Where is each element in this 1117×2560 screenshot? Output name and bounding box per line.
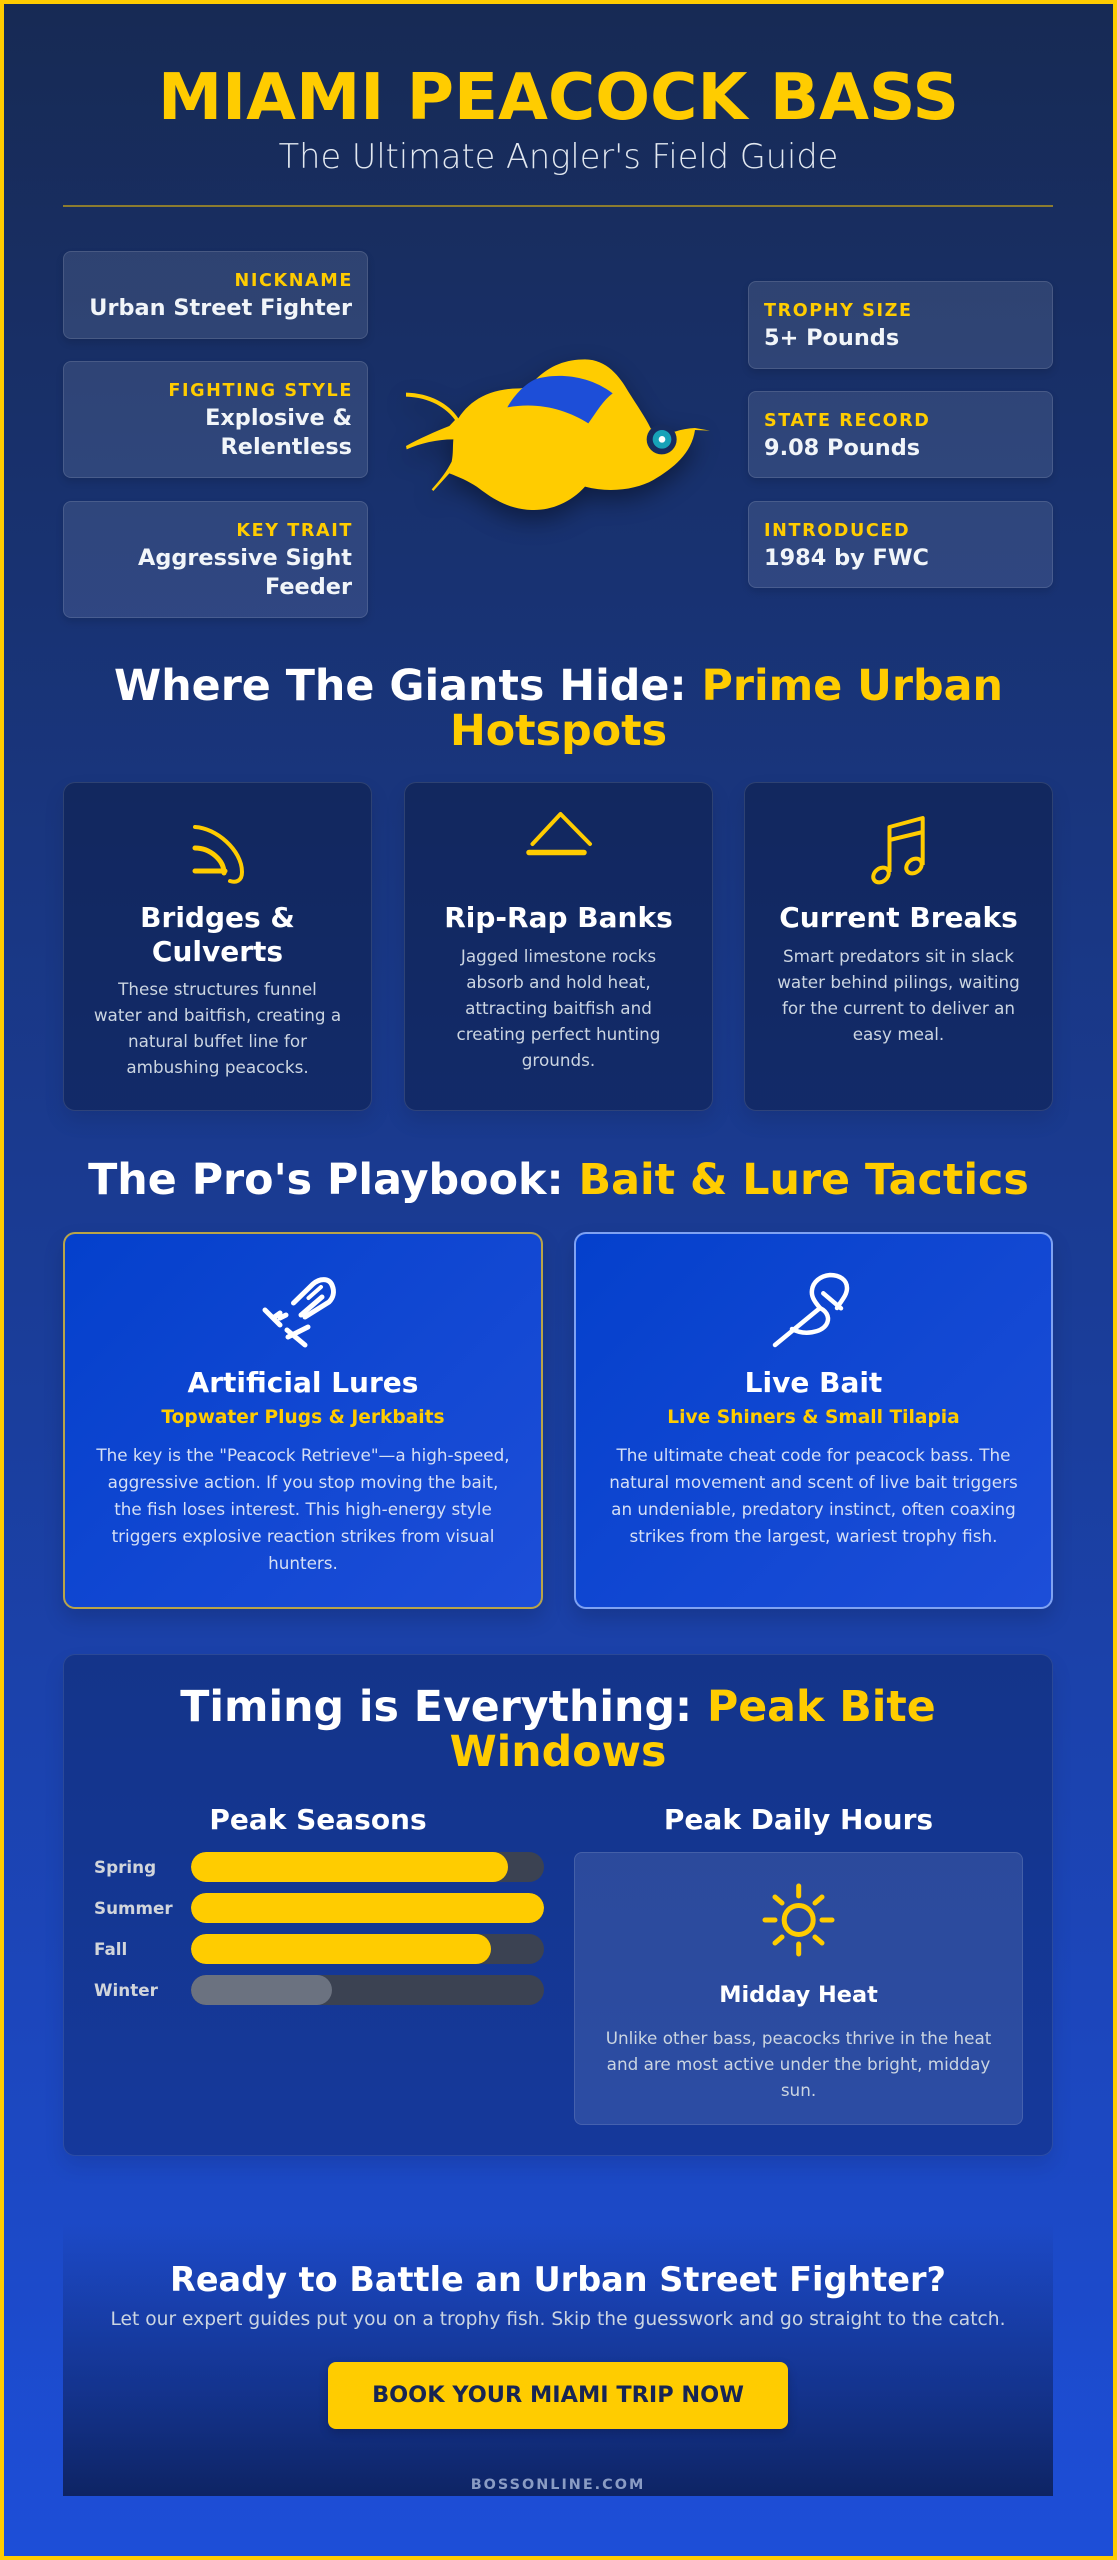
card text: Unlike other bass, peacocks thrive in the heat [606, 2028, 991, 2048]
card title: Midday Heat [719, 1982, 878, 2008]
stat card: fighting style: Explosive & [205, 404, 352, 430]
card text [606, 2028, 991, 2100]
card text: attracting baitfish and [465, 998, 652, 1018]
stat card: introduced: 1984 by FWC [764, 544, 929, 570]
panel: current breaks [744, 782, 1053, 1111]
bar: summer [191, 1893, 544, 1923]
stat card: key trait: KEY TRAIT [236, 521, 353, 541]
card text: for the current to deliver an [782, 998, 1015, 1018]
card text [94, 978, 341, 1076]
card subtitle: Live Shiners & Small Tilapia [667, 1406, 960, 1428]
cta text: Let our expert guides put you on a trophy fish. Skip the guesswork and go straight to the catch. [110, 2309, 1006, 2330]
heading: peak daily hours: Peak Daily Hours [664, 1802, 933, 1836]
heading: timing: Windows [450, 1727, 666, 1777]
heading: playbook: The Pro's Playbook: Bait & Lure Tactics [88, 1154, 1029, 1204]
card text: The ultimate cheat code for peacock bass. The [617, 1444, 1010, 1464]
card text: creating perfect hunting [457, 1024, 660, 1044]
stat card: fighting style: Relentless [221, 434, 352, 460]
card title: Current Breaks [779, 901, 1018, 934]
stat card: nickname: Urban Street Fighter [89, 294, 352, 320]
card text: sun. [781, 2080, 816, 2100]
bar: spring [191, 1852, 544, 1882]
stat card: introduced [748, 501, 1053, 588]
card text: Smart predators sit in slack [783, 946, 1014, 966]
heading: hotspots [114, 661, 1003, 756]
panel: artificial lures [63, 1232, 543, 1609]
stat card: key trait: Aggressive Sight [138, 544, 352, 570]
card title [140, 901, 295, 968]
icon: bridge [192, 825, 244, 884]
icon: feather [772, 1272, 850, 1348]
heading: timing [180, 1682, 936, 1777]
stat card: nickname [63, 251, 368, 339]
panel: rip-rap banks [404, 782, 713, 1111]
title: MIAMI PEACOCK BASS [158, 60, 959, 135]
stat card: trophy size [748, 281, 1053, 369]
stat card: fighting style: FIGHTING STYLE [168, 381, 353, 401]
bar: fall [191, 1934, 544, 1964]
panel: timing [63, 1654, 1053, 2156]
icon: peacock bass fish [406, 359, 710, 530]
panel: live bait [574, 1232, 1053, 1609]
heading: hotspots: Hotspots [450, 706, 667, 756]
heading: hotspots: Where The Giants Hide: Prime Urban [114, 661, 1003, 711]
stat card: key trait: Feeder [265, 574, 352, 600]
card subtitle: Topwater Plugs & Jerkbaits [161, 1406, 445, 1428]
card title: Bridges & [140, 901, 295, 934]
stat card: state record: STATE RECORD [764, 411, 930, 431]
heading: timing: Timing is Everything: Peak Bite [180, 1682, 936, 1732]
cta heading: Ready to Battle an Urban Street Fighter? [170, 2260, 946, 2299]
card title: Artificial Lures [188, 1366, 418, 1399]
card text: the fish loses interest. This high-energy style [114, 1499, 492, 1519]
stat card: state record: 9.08 Pounds [764, 434, 920, 460]
card text: aggressive action. If you stop moving the bait, [108, 1472, 498, 1492]
card text: The key is the "Peacock Retrieve"—a high-speed, [96, 1444, 510, 1464]
icon: rocks [526, 812, 592, 856]
stat card: trophy size: TROPHY SIZE [764, 301, 913, 321]
heading: peak seasons: Peak Seasons [209, 1802, 427, 1836]
panel: call to action [63, 2223, 1053, 2496]
bar label: spring: Spring [94, 1857, 156, 1877]
icon: music note [871, 816, 925, 884]
card title: Rip-Rap Banks [444, 901, 673, 934]
icon: sun [762, 1884, 834, 1956]
button: BOOK YOUR MIAMI TRIP NOW [372, 2382, 744, 2408]
card text: grounds. [522, 1050, 595, 1070]
card text [96, 1444, 510, 1573]
card text: natural buffet line for [128, 1030, 307, 1050]
stat card: nickname: NICKNAME [235, 271, 353, 291]
card text: hunters. [268, 1553, 338, 1573]
card text [609, 1444, 1018, 1546]
card title: Live Bait [745, 1366, 882, 1399]
card text [457, 946, 660, 1070]
card text: strikes from the largest, wariest trophy fish. [630, 1526, 997, 1546]
source: BOSSONLINE.COM [471, 2477, 645, 2493]
card text [777, 946, 1020, 1044]
card text: ambushing peacocks. [126, 1056, 309, 1076]
card text: water behind pilings, waiting [777, 972, 1020, 992]
bar label: summer: Summer [94, 1898, 173, 1918]
panel: bridges and culverts [63, 782, 372, 1111]
card text: and are most active under the bright, midday [607, 2054, 990, 2074]
bar chart: peak seasons [94, 1852, 544, 2005]
bar: winter [191, 1975, 544, 2005]
icon: lure [262, 1277, 336, 1348]
card text: Jagged limestone rocks [461, 946, 656, 966]
subtitle: The Ultimate Angler's Field Guide [279, 137, 838, 176]
card text: an undeniable, predatory instinct, often coaxing [611, 1499, 1016, 1519]
stat card: introduced: INTRODUCED [764, 521, 910, 541]
stat card: fighting style [63, 361, 368, 478]
card text: absorb and hold heat, [466, 972, 651, 992]
bar label: winter: Winter [94, 1980, 158, 2000]
card text: water and baitfish, creating a [94, 1004, 341, 1024]
panel: midday heat [574, 1852, 1023, 2125]
button [328, 2362, 788, 2429]
card text: natural movement and scent of live bait triggers [609, 1472, 1018, 1492]
card text: easy meal. [853, 1024, 944, 1044]
stat card: state record [748, 391, 1053, 478]
card title: Culverts [152, 935, 283, 968]
stat card: key trait [63, 501, 368, 618]
card text: triggers explosive reaction strikes from visual [112, 1526, 494, 1546]
stat card: trophy size: 5+ Pounds [764, 324, 899, 350]
bar label: fall: Fall [94, 1939, 127, 1959]
card text: These structures funnel [118, 978, 317, 998]
